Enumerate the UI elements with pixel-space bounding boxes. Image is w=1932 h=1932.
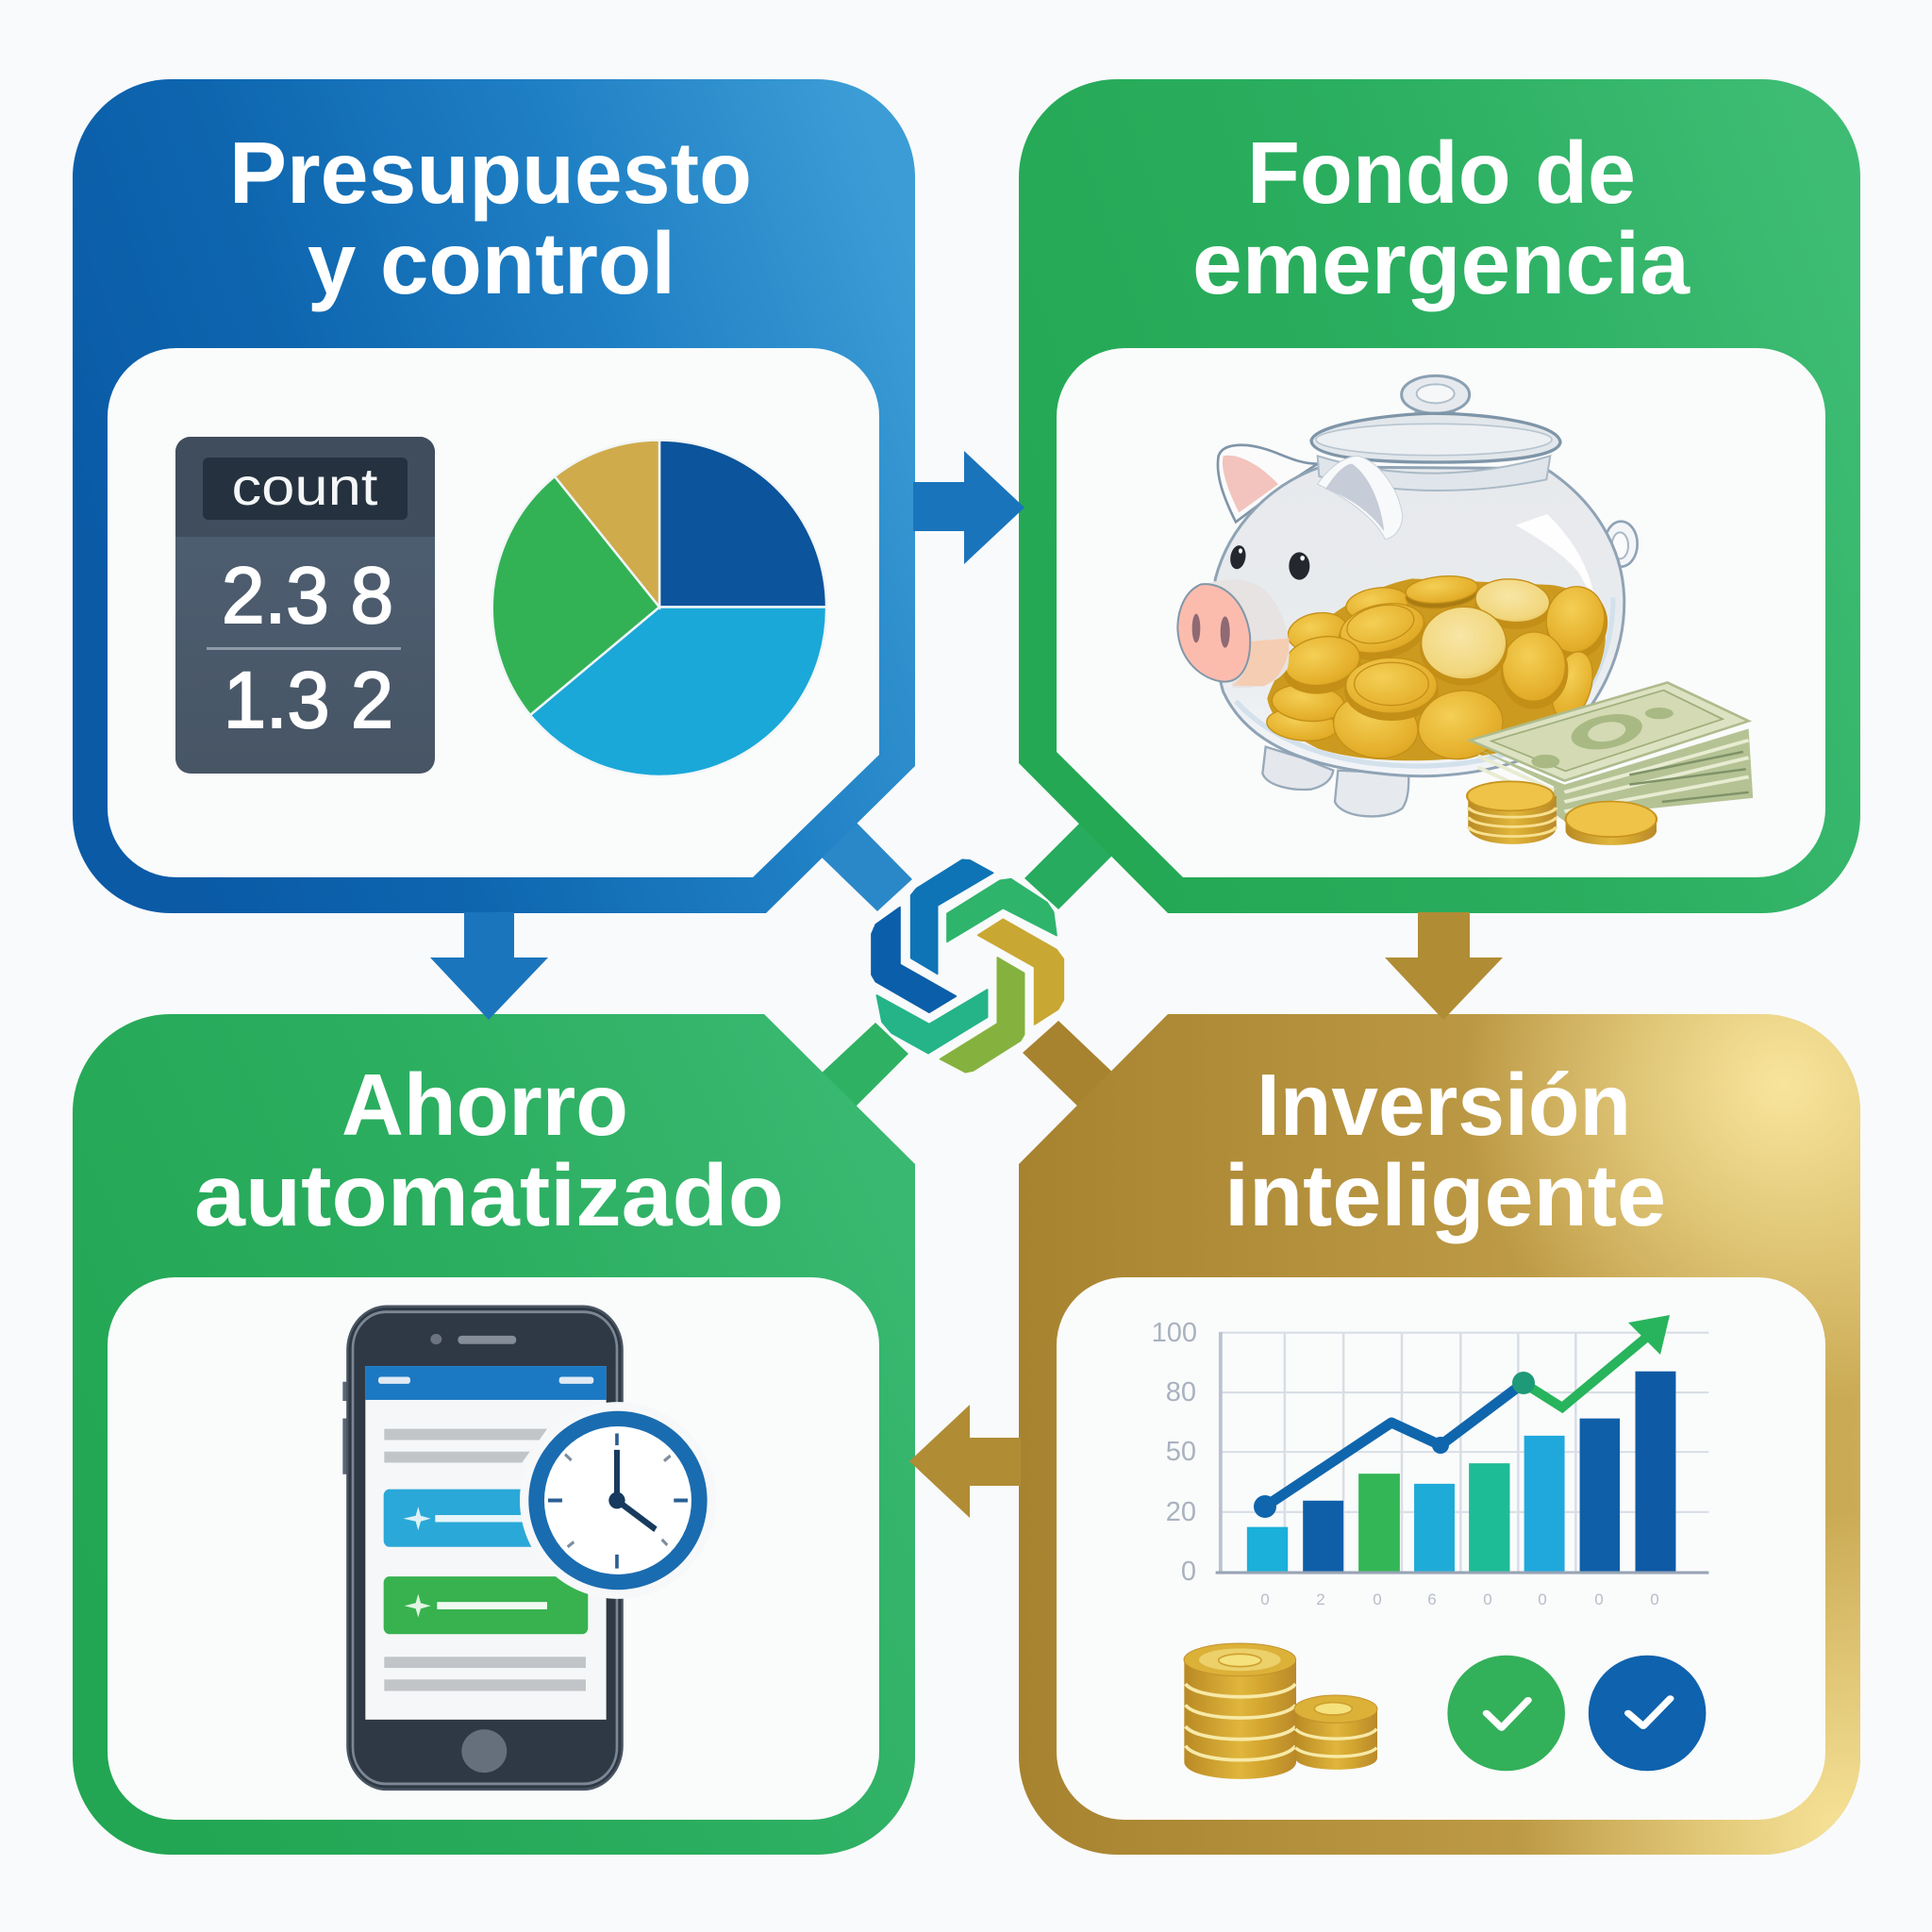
y axis labels [1152,1318,1197,1587]
connector: bottom-right panel to centre [1023,1021,1116,1110]
arrow: blue down [430,912,548,1020]
gold coins in jar [1265,574,1612,766]
arrow: gold down [1385,912,1503,1020]
trend line [1254,1315,1670,1518]
connector: top-right panel to centre [1024,813,1124,909]
pig eyes [1228,544,1309,580]
arrow: gold left [909,1405,1021,1518]
icon: calculator: 2.3 8 [222,551,393,640]
icon: calculator: count [232,457,378,516]
heading: Ahorro automatizado: automatizado [194,1146,784,1244]
heading: Ahorro automatizado: Ahorro [341,1056,628,1154]
x axis labels: 0 [1650,1591,1659,1608]
connector: bottom-left panel to centre [819,1023,908,1110]
jar body [1214,467,1624,776]
jar lid [1311,413,1560,462]
chart: pie [492,440,826,776]
legs [1262,747,1333,790]
heading: Ahorro automatizado [194,1056,784,1244]
heading: Presupuesto y control [229,124,752,312]
connector: top-left panel to centre [819,820,912,911]
heading: Presupuesto y control: y control [308,214,675,312]
heading: Inversión inteligente: inteligente [1224,1146,1666,1244]
y axis labels: 50 [1166,1437,1196,1467]
heading: Fondo de emergencia: emergencia [1192,214,1690,312]
icon: green check badge [1447,1656,1565,1771]
x axis labels: 0 [1260,1591,1270,1608]
jar lid knob [1402,375,1470,430]
heading: Inversión inteligente [1224,1056,1666,1244]
heading: Presupuesto y control: Presupuesto [229,124,752,222]
y axis labels: 0 [1181,1557,1196,1587]
small coin stacks [1468,796,1557,844]
icon: glass piggy bank with coins [1177,375,1638,816]
pig snout [1177,579,1290,688]
chart grid and bars [1216,1332,1708,1574]
clock [520,1402,716,1599]
icon: gold coin stacks [1184,1643,1377,1779]
tail [1605,522,1638,567]
x axis labels: 0 [1594,1591,1604,1608]
heading: Fondo de emergencia [1192,124,1690,312]
y axis labels: 80 [1166,1377,1196,1407]
heading: Fondo de emergencia: Fondo de [1247,124,1636,222]
jar collar [1318,456,1550,491]
icon: calculator [175,437,435,774]
icon: central hexagonal logo [872,859,1063,1073]
x axis labels: 0 [1538,1591,1547,1608]
panel: Inversión inteligente [1019,1014,1860,1855]
panel: Ahorro automatizado [73,1014,915,1855]
screen rows [384,1429,588,1691]
x axis labels [1260,1591,1659,1608]
panel: Fondo de emergencia [1019,79,1860,913]
y axis labels: 100 [1152,1318,1197,1348]
x axis labels: 0 [1483,1591,1492,1608]
phone body [342,1307,623,1790]
y axis labels: 20 [1166,1497,1196,1527]
x axis labels: 0 [1373,1591,1382,1608]
far ear [1218,445,1318,522]
near ear [1318,456,1403,540]
chart: growth bars and line [1152,1315,1708,1608]
x axis labels: 2 [1316,1591,1325,1608]
icon: phone with clock [342,1307,716,1790]
jar highlight [1516,514,1596,604]
icon: blue check badge [1589,1656,1706,1771]
icon: cash stack and small coins [1467,683,1753,845]
arrow: blue right [913,451,1024,564]
heading: Inversión inteligente: Inversión [1257,1056,1631,1154]
icon: calculator: 1.3 2 [224,656,393,744]
x axis labels: 6 [1427,1591,1437,1608]
cash stack [1475,728,1753,821]
panel: Presupuesto y control [73,79,915,913]
